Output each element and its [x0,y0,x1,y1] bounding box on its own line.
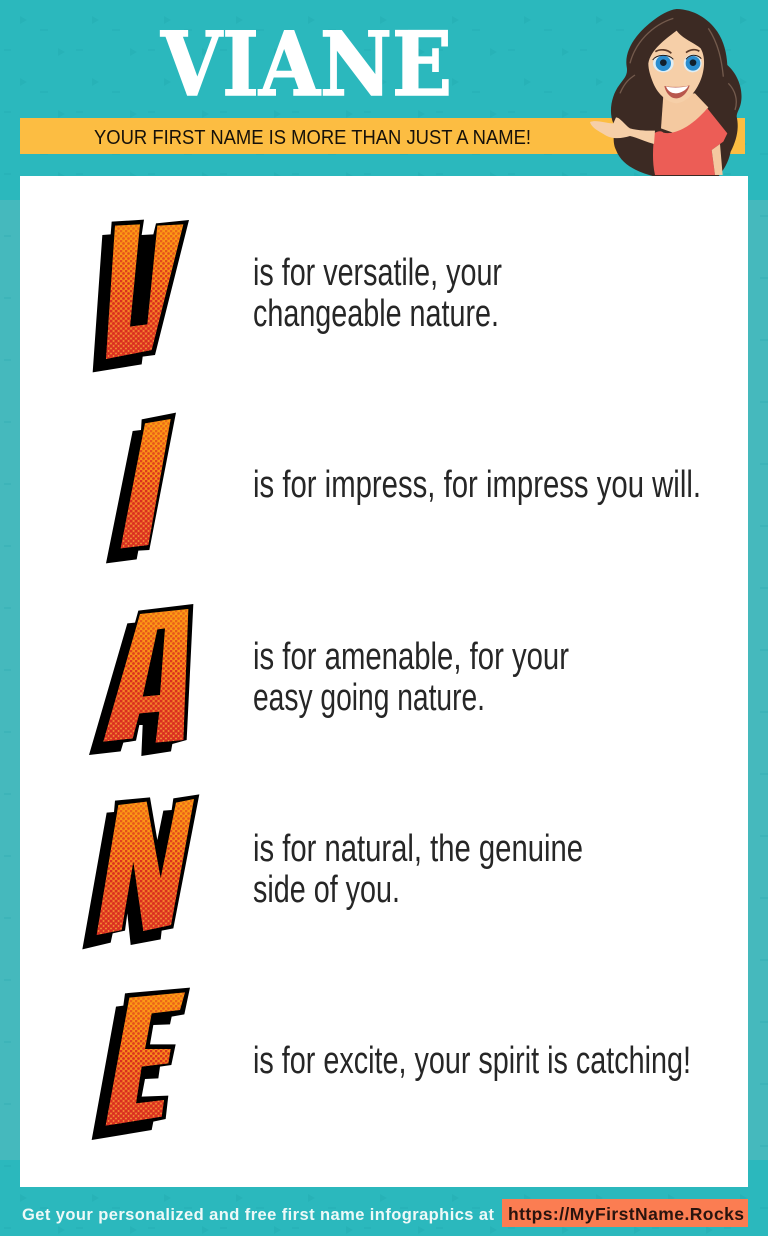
subtitle banner [20,118,745,154]
text: N line [253,828,583,911]
text: N line: is for natural, the genuine [253,828,583,870]
text: V line: is for versatile, your [253,252,502,294]
footer link: https://MyFirstName.Rocks [508,1204,744,1224]
panel: acrostic [20,176,748,1187]
icon: cartoon woman [590,9,742,177]
text: A line: is for amenable, for your [253,636,569,678]
footer [22,1199,748,1227]
letter I [106,413,176,563]
text: V line [253,252,502,335]
letter E [92,988,190,1140]
footer link [502,1199,748,1227]
text: V line: changeable nature. [253,293,499,335]
letter V [93,220,189,372]
subtitle banner: YOUR FIRST NAME IS MORE THAN JUST A NAME! [94,126,531,149]
letter N [82,794,199,949]
text: A line [253,636,569,719]
text: N line: side of you. [253,869,400,911]
text: A line: easy going nature. [253,677,485,719]
title: VIANE [160,12,452,116]
footer text: Get your personalized and free first name infographics at [22,1206,494,1224]
letter A [89,604,193,756]
